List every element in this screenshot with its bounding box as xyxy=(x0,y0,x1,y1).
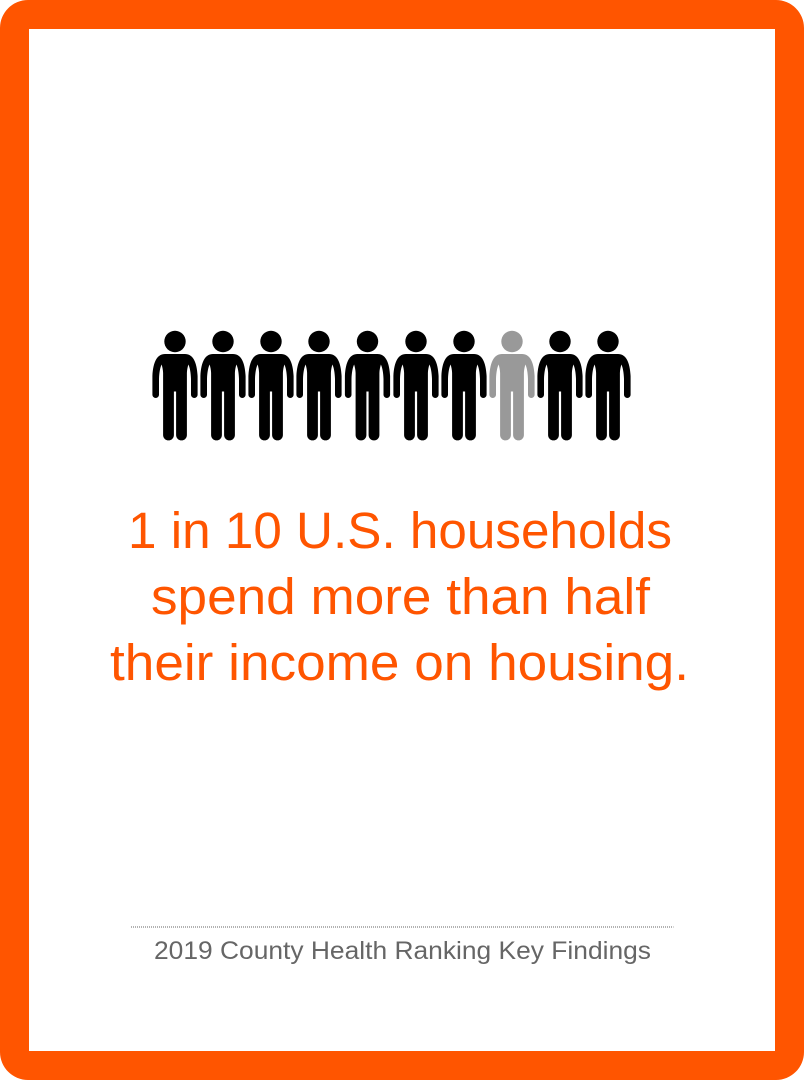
headline statement: 1 in 10 U.S. households xyxy=(128,502,672,559)
headline statement xyxy=(110,502,689,691)
pictogram: ten people, one highlighted grey xyxy=(152,331,631,440)
dotted divider xyxy=(131,926,674,928)
headline statement: their income on housing. xyxy=(110,634,689,691)
source caption: 2019 County Health Ranking Key Findings xyxy=(154,937,651,965)
headline statement: spend more than half xyxy=(151,568,651,625)
